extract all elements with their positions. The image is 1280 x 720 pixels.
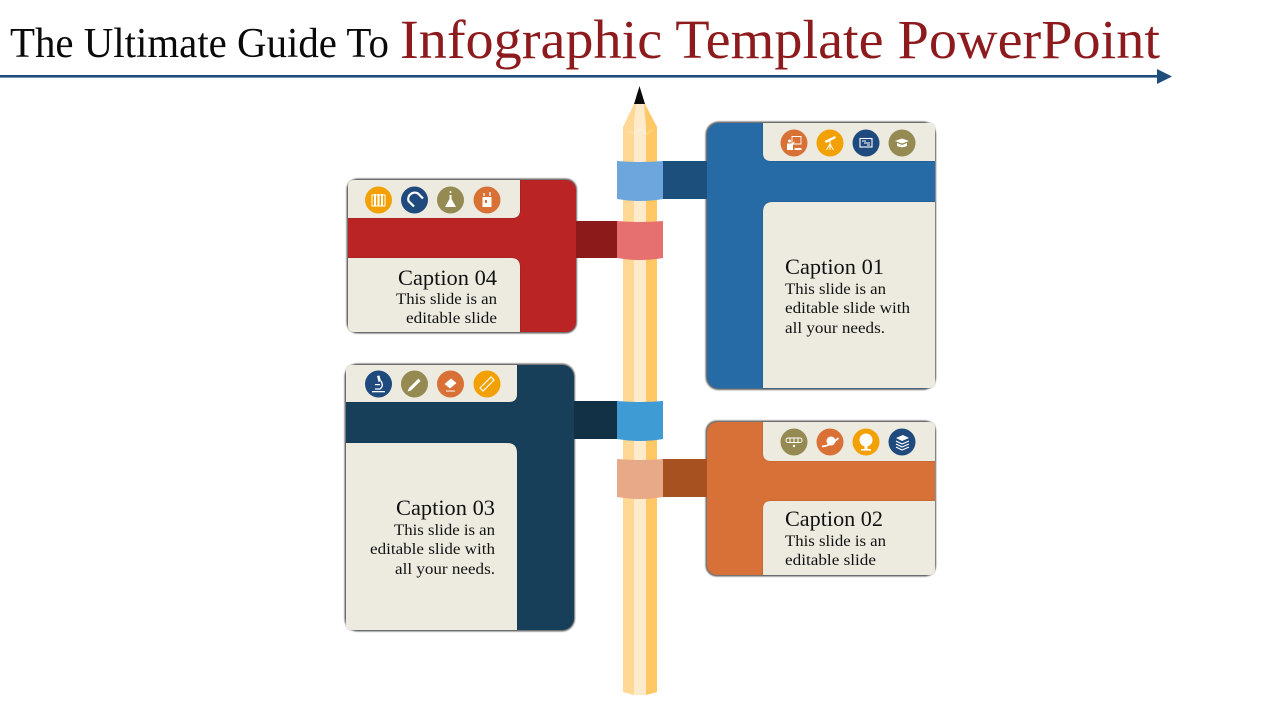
caption 03 text: editable slide with (370, 541, 495, 558)
icon: test tubes (365, 186, 392, 214)
caption 04 text: This slide is an (396, 291, 497, 308)
icon: telescope (816, 130, 844, 156)
caption 03 text: Caption 03 (396, 495, 495, 520)
panel: caption 02 (617, 420, 936, 576)
caption 03 text: all your needs. (395, 561, 495, 578)
pencil band: caption 01 (617, 161, 663, 201)
panel: caption 01 (617, 122, 936, 390)
caption 02 text (785, 506, 886, 569)
connector: caption 04 (576, 221, 617, 258)
connector: caption 03 (574, 401, 617, 439)
icon: globe (852, 428, 880, 456)
caption 03 text: This slide is an (394, 522, 495, 539)
icon: graduation cap (888, 130, 916, 156)
pencil band: caption 02 (617, 459, 663, 499)
pencil band: caption 03 (617, 401, 663, 441)
caption 02 text: Caption 02 (785, 506, 883, 531)
text tray: caption 02 (763, 501, 935, 575)
icon: ruler (474, 370, 500, 398)
text tray: caption 03 (346, 443, 517, 630)
icon: magnet (401, 186, 428, 214)
caption 01 text: all your needs. (785, 320, 885, 337)
icon: eraser (437, 370, 464, 398)
panel: caption 03 (344, 364, 663, 632)
caption 01 text (785, 254, 910, 337)
title: Infographic Template PowerPoint (400, 9, 1160, 70)
icon: teacher at board (780, 130, 808, 156)
caption 04 text: Caption 04 (398, 265, 497, 290)
icon tray: caption 03 (346, 365, 517, 402)
icon tray: caption 02 (763, 422, 935, 461)
pencil (623, 86, 657, 695)
caption 01 text: editable slide with (785, 300, 910, 317)
icon: beaker (474, 186, 500, 214)
caption 02 text: This slide is an (785, 533, 886, 550)
caption 04 text (396, 265, 497, 327)
icon tray: caption 01 (763, 123, 935, 161)
icon: screen (852, 130, 880, 156)
caption 01 text: Caption 01 (785, 254, 884, 279)
caption 02 text: editable slide (785, 552, 876, 569)
connector: caption 01 (663, 161, 707, 199)
icon: books (888, 428, 916, 456)
caption 01 text: This slide is an (785, 281, 886, 298)
icon: pencil (401, 370, 428, 398)
icon: flask (437, 186, 464, 214)
icon tray: caption 04 (348, 180, 520, 218)
panel: caption 04 (346, 178, 663, 334)
title (10, 9, 1160, 70)
icon: molecule (780, 428, 808, 456)
pencil band: caption 04 (617, 221, 663, 260)
arrow: title underline (0, 69, 1172, 84)
caption 03 text (370, 495, 495, 578)
icon: microscope (365, 370, 392, 398)
icon: planet (816, 428, 844, 456)
caption 04 text: editable slide (406, 310, 497, 327)
text tray: caption 04 (348, 258, 520, 332)
text tray: caption 01 (763, 202, 935, 388)
connector: caption 02 (663, 459, 707, 497)
title: The Ultimate Guide To (10, 21, 389, 67)
